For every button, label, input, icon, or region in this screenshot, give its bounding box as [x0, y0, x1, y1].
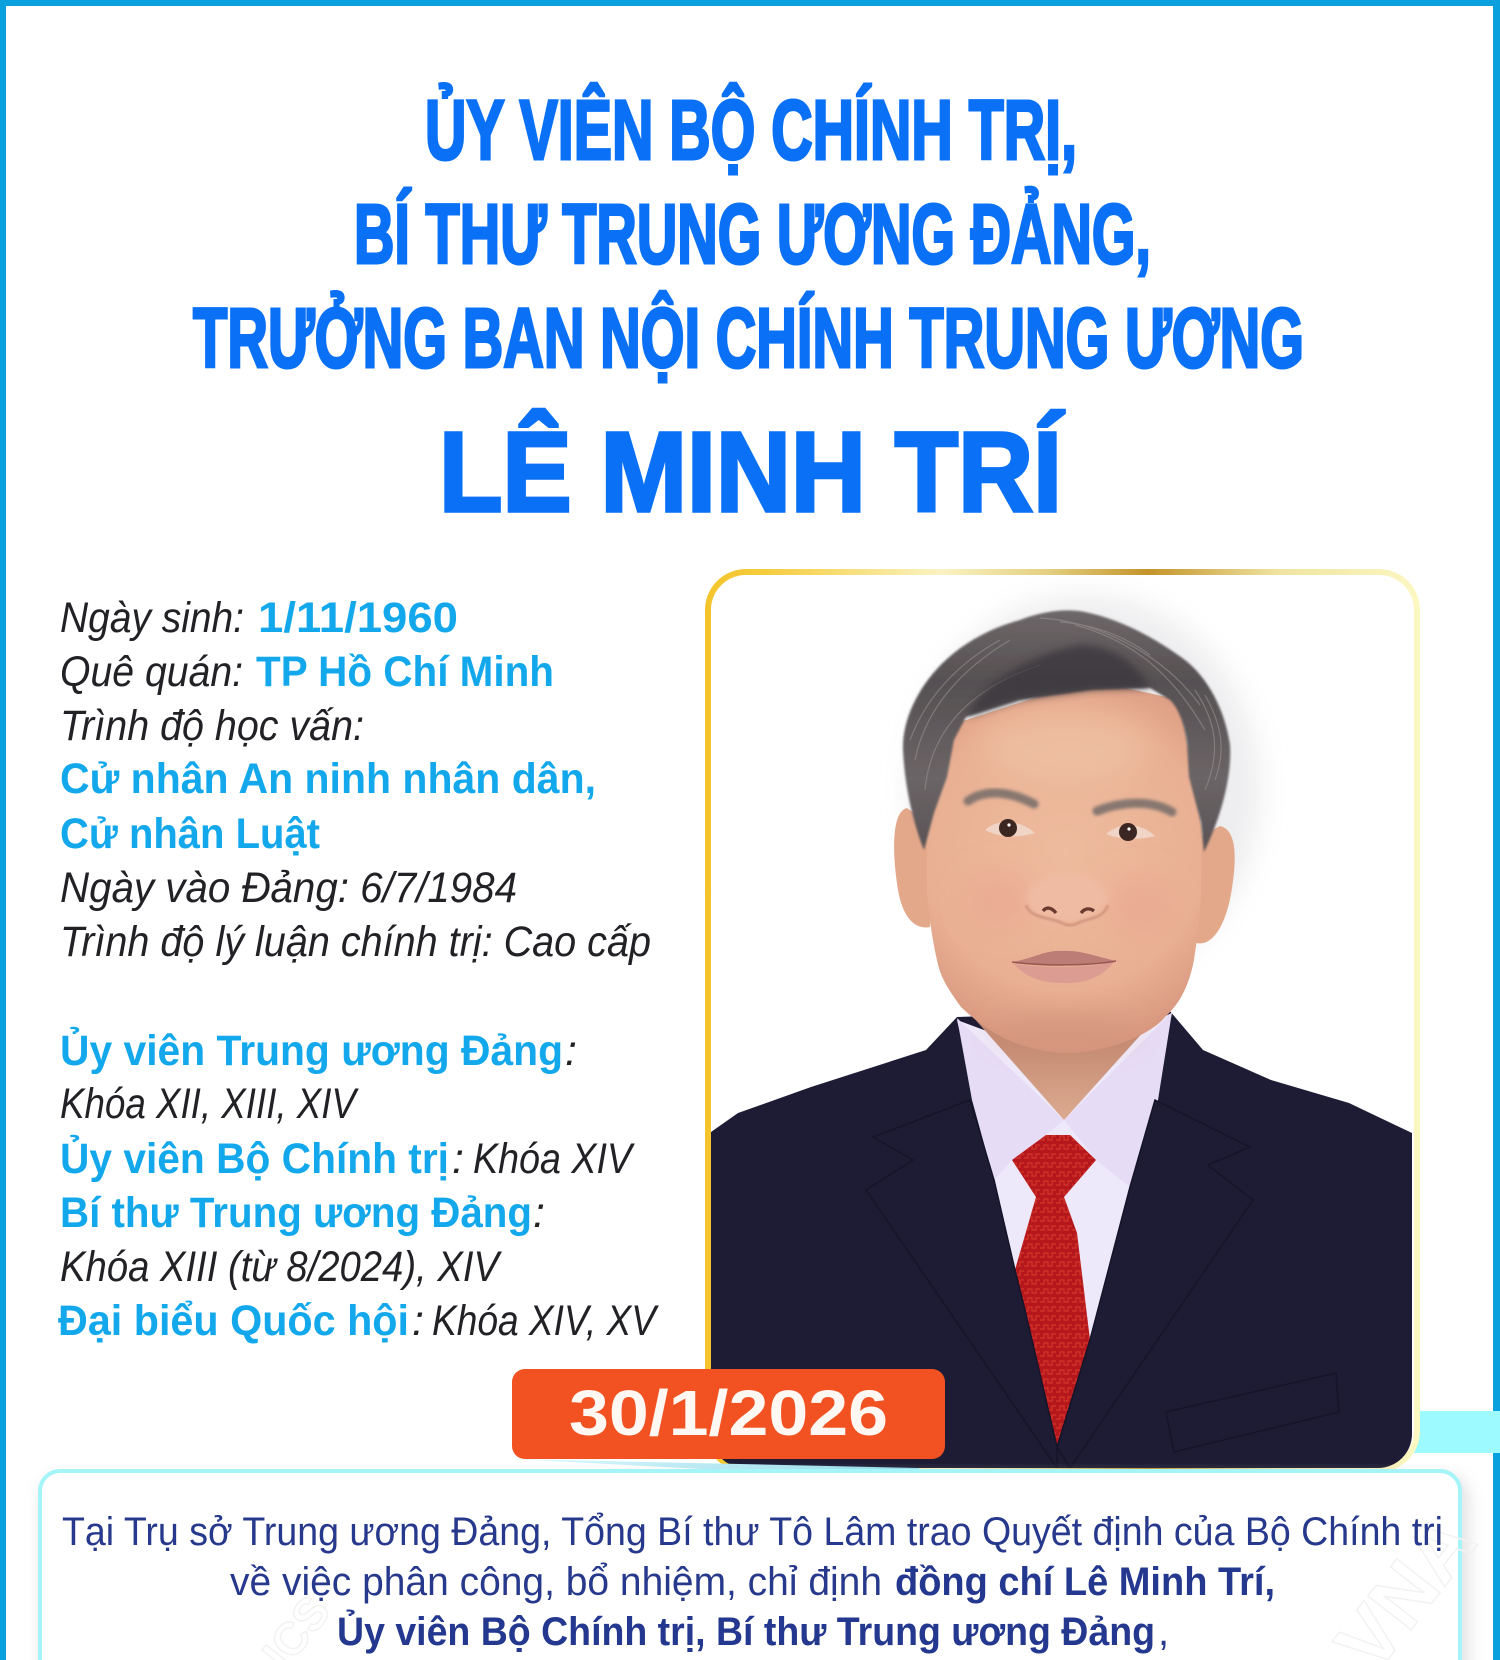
personal details text	[60, 594, 651, 966]
personal details text: Trình độ lý luận chính trị: Cao cấp	[60, 918, 651, 966]
gold frame	[708, 572, 1417, 1469]
hair	[903, 610, 1230, 852]
dark hair front	[966, 645, 1150, 717]
party positions text: Khóa XII, XIII, XIV	[60, 1080, 360, 1128]
hair streaks	[910, 618, 1221, 790]
neck	[974, 1019, 1140, 1120]
watermarks	[252, 1499, 1492, 1660]
cheek and forehead shading	[966, 720, 1174, 1044]
cyan wedge under date	[512, 1459, 919, 1476]
party positions text: Bí thư Trung ương Đảng	[60, 1189, 532, 1237]
info panel: ,	[1158, 1610, 1169, 1654]
title: ỦY VIÊN BỘ CHÍNH TRỊ,	[425, 83, 1077, 177]
party positions text: :	[565, 1027, 577, 1075]
shirt	[957, 1013, 1172, 1338]
eyes	[985, 819, 1155, 841]
party positions text: Đại biểu Quốc hội	[58, 1297, 409, 1345]
head	[894, 610, 1235, 1053]
head shadow	[964, 594, 1261, 898]
suit pocket	[1166, 1373, 1339, 1452]
title	[193, 83, 1304, 535]
personal details text: Trình độ học vấn:	[60, 702, 364, 750]
party positions text: Khóa XIII (từ 8/2024), XIV	[60, 1243, 503, 1291]
panel text: Tại Trụ sở Trung ương Đảng, Tổng Bí thư Tô Lâm trao Quyết định của Bộ Chính trị	[62, 1510, 1443, 1554]
shirt collar	[957, 1012, 1172, 1187]
suit lapels	[866, 1100, 1253, 1468]
face	[927, 680, 1202, 1053]
date badge: 30/1/2026	[569, 1377, 888, 1449]
personal details text: 1/11/1960	[258, 594, 458, 642]
nose	[1026, 874, 1108, 925]
info panel	[40, 1471, 1492, 1660]
personal details text: Ngày vào Đảng: 6/7/1984	[60, 864, 517, 912]
party positions text: Ủy viên Trung ương Đảng	[60, 1026, 563, 1075]
panel shadow	[42, 1476, 1468, 1660]
party positions text: :	[412, 1297, 424, 1345]
party positions text: :	[533, 1189, 545, 1237]
portrait photo with gold frame	[705, 572, 1417, 1470]
title: LÊ MINH TRÍ	[439, 409, 1064, 535]
info panel: về việc phân công, bổ nhiệm, chỉ định	[230, 1560, 882, 1604]
info panel: Ủy viên Bộ Chính trị, Bí thư Trung ương Đảng	[337, 1608, 1155, 1654]
party positions text: Khóa XIV	[473, 1135, 636, 1183]
eyebrows	[968, 793, 1172, 812]
party positions text: Ủy viên Bộ Chính trị	[60, 1134, 449, 1183]
necktie	[1012, 1135, 1096, 1447]
party positions text: Khóa XIV, XV	[432, 1297, 660, 1345]
date badge	[512, 1369, 945, 1459]
personal details text: Quê quán:	[60, 648, 243, 696]
personal details text: Ngày sinh:	[60, 594, 244, 642]
cyan band behind portrait	[1400, 1411, 1500, 1453]
info panel: đồng chí Lê Minh Trí,	[895, 1560, 1275, 1604]
personal details text: TP Hồ Chí Minh	[256, 648, 554, 696]
party positions text	[58, 1026, 660, 1345]
party positions text: :	[452, 1135, 464, 1183]
suit	[705, 1010, 1412, 1470]
personal details text: Cử nhân Luật	[60, 810, 320, 858]
ears	[894, 808, 1235, 943]
panel box	[40, 1471, 1460, 1660]
personal details text: Cử nhân An ninh nhân dân,	[60, 755, 596, 803]
mouth	[1012, 951, 1116, 983]
